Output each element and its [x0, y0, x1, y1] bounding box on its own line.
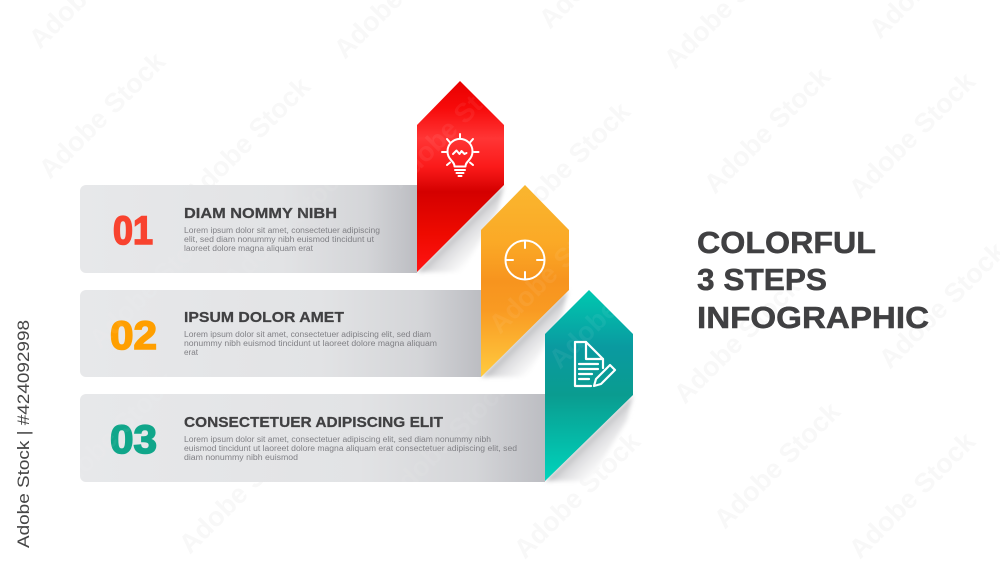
step 2 body text — [184, 330, 437, 357]
watermark pattern: Adobe Stock — [698, 61, 837, 199]
step 3 body text — [184, 435, 517, 462]
title: COLORFUL — [697, 225, 876, 260]
watermark overlay: Adobe Stock — [483, 201, 622, 339]
icon: light bulb — [442, 134, 478, 176]
watermark overlay — [43, 56, 682, 509]
step 2 body text: Lorem ipsum dolor sit amet, consectetuer adipiscing elit, sed diam — [184, 330, 431, 339]
shadow: red arrow curl — [417, 185, 504, 272]
step 1 heading: DIAM NOMMY NIBH — [184, 205, 337, 222]
step 2 body text: erat — [184, 348, 199, 357]
step 2 number: 02 — [110, 314, 157, 358]
watermark overlay: Adobe Stock — [218, 156, 357, 294]
shadow: teal arrow curl — [545, 395, 633, 481]
panel: step 3 bar — [80, 394, 545, 482]
step 1 body text: Lorem ipsum dolor sit amet, consectetuer adipiscing — [184, 226, 380, 235]
shadow: orange arrow curl — [481, 290, 568, 377]
title: 3 STEPS — [697, 262, 827, 297]
stock id side label: Adobe Stock | #424092998 — [14, 320, 33, 548]
step 3 body text: diam nonummy nibh euismod — [184, 453, 298, 462]
arrow: teal — [545, 290, 633, 481]
step 2 heading: IPSUM DOLOR AMET — [184, 309, 344, 326]
step 1 body text: elit, sed diam nonummy nibh euismod tincidunt ut — [184, 235, 375, 244]
watermark pattern: Adobe Stock — [178, 71, 317, 209]
icon: target — [506, 240, 544, 280]
icon: document and pencil — [575, 342, 615, 386]
step 1 body text — [184, 226, 380, 253]
watermark pattern: Adobe Stock — [508, 426, 647, 563]
arrow: orange — [481, 185, 569, 377]
watermark pattern: Adobe Stock — [33, 46, 172, 184]
step 3 heading: CONSECTETUER ADIPISCING ELIT — [184, 414, 443, 431]
panel: step 1 bar — [80, 185, 417, 273]
step 3 number: 03 — [110, 418, 157, 462]
watermark pattern: Adobe Stock — [708, 396, 847, 534]
step 1 number: 01 — [113, 209, 153, 253]
panel: step 2 bar — [80, 290, 481, 377]
watermark pattern: Adobe Stock — [668, 271, 807, 409]
watermark overlay: Adobe Stock — [43, 366, 182, 504]
watermark pattern: Adobe Stock — [173, 421, 312, 559]
title: INFOGRAPHIC — [697, 300, 929, 335]
watermark overlay: Adobe Stock — [83, 216, 222, 354]
step 2 body text: nonummy nibh euismod tincidunt ut laoreet dolore magna aliquam — [184, 339, 437, 348]
step 3 body text: euismod tincidunt ut laoreet dolore magna aliquam erat consectetuer adipiscing elit, sed — [184, 444, 517, 453]
watermark overlay: Adobe Stock — [543, 236, 682, 374]
step 1 body text: laoreet dolore magna aliquam erat — [184, 244, 314, 253]
watermark pattern: Adobe Stock — [843, 66, 982, 204]
step 3 body text: Lorem ipsum dolor sit amet, consectetuer adipiscing elit, sed diam nonummy nibh — [184, 435, 491, 444]
watermark pattern: Adobe Stock — [498, 96, 637, 234]
watermark overlay: Adobe Stock — [383, 56, 522, 194]
arrow: red — [417, 81, 504, 272]
watermark overlay: Adobe Stock — [378, 371, 517, 509]
title — [697, 225, 929, 335]
watermark pattern: Adobe Stock — [843, 426, 982, 563]
